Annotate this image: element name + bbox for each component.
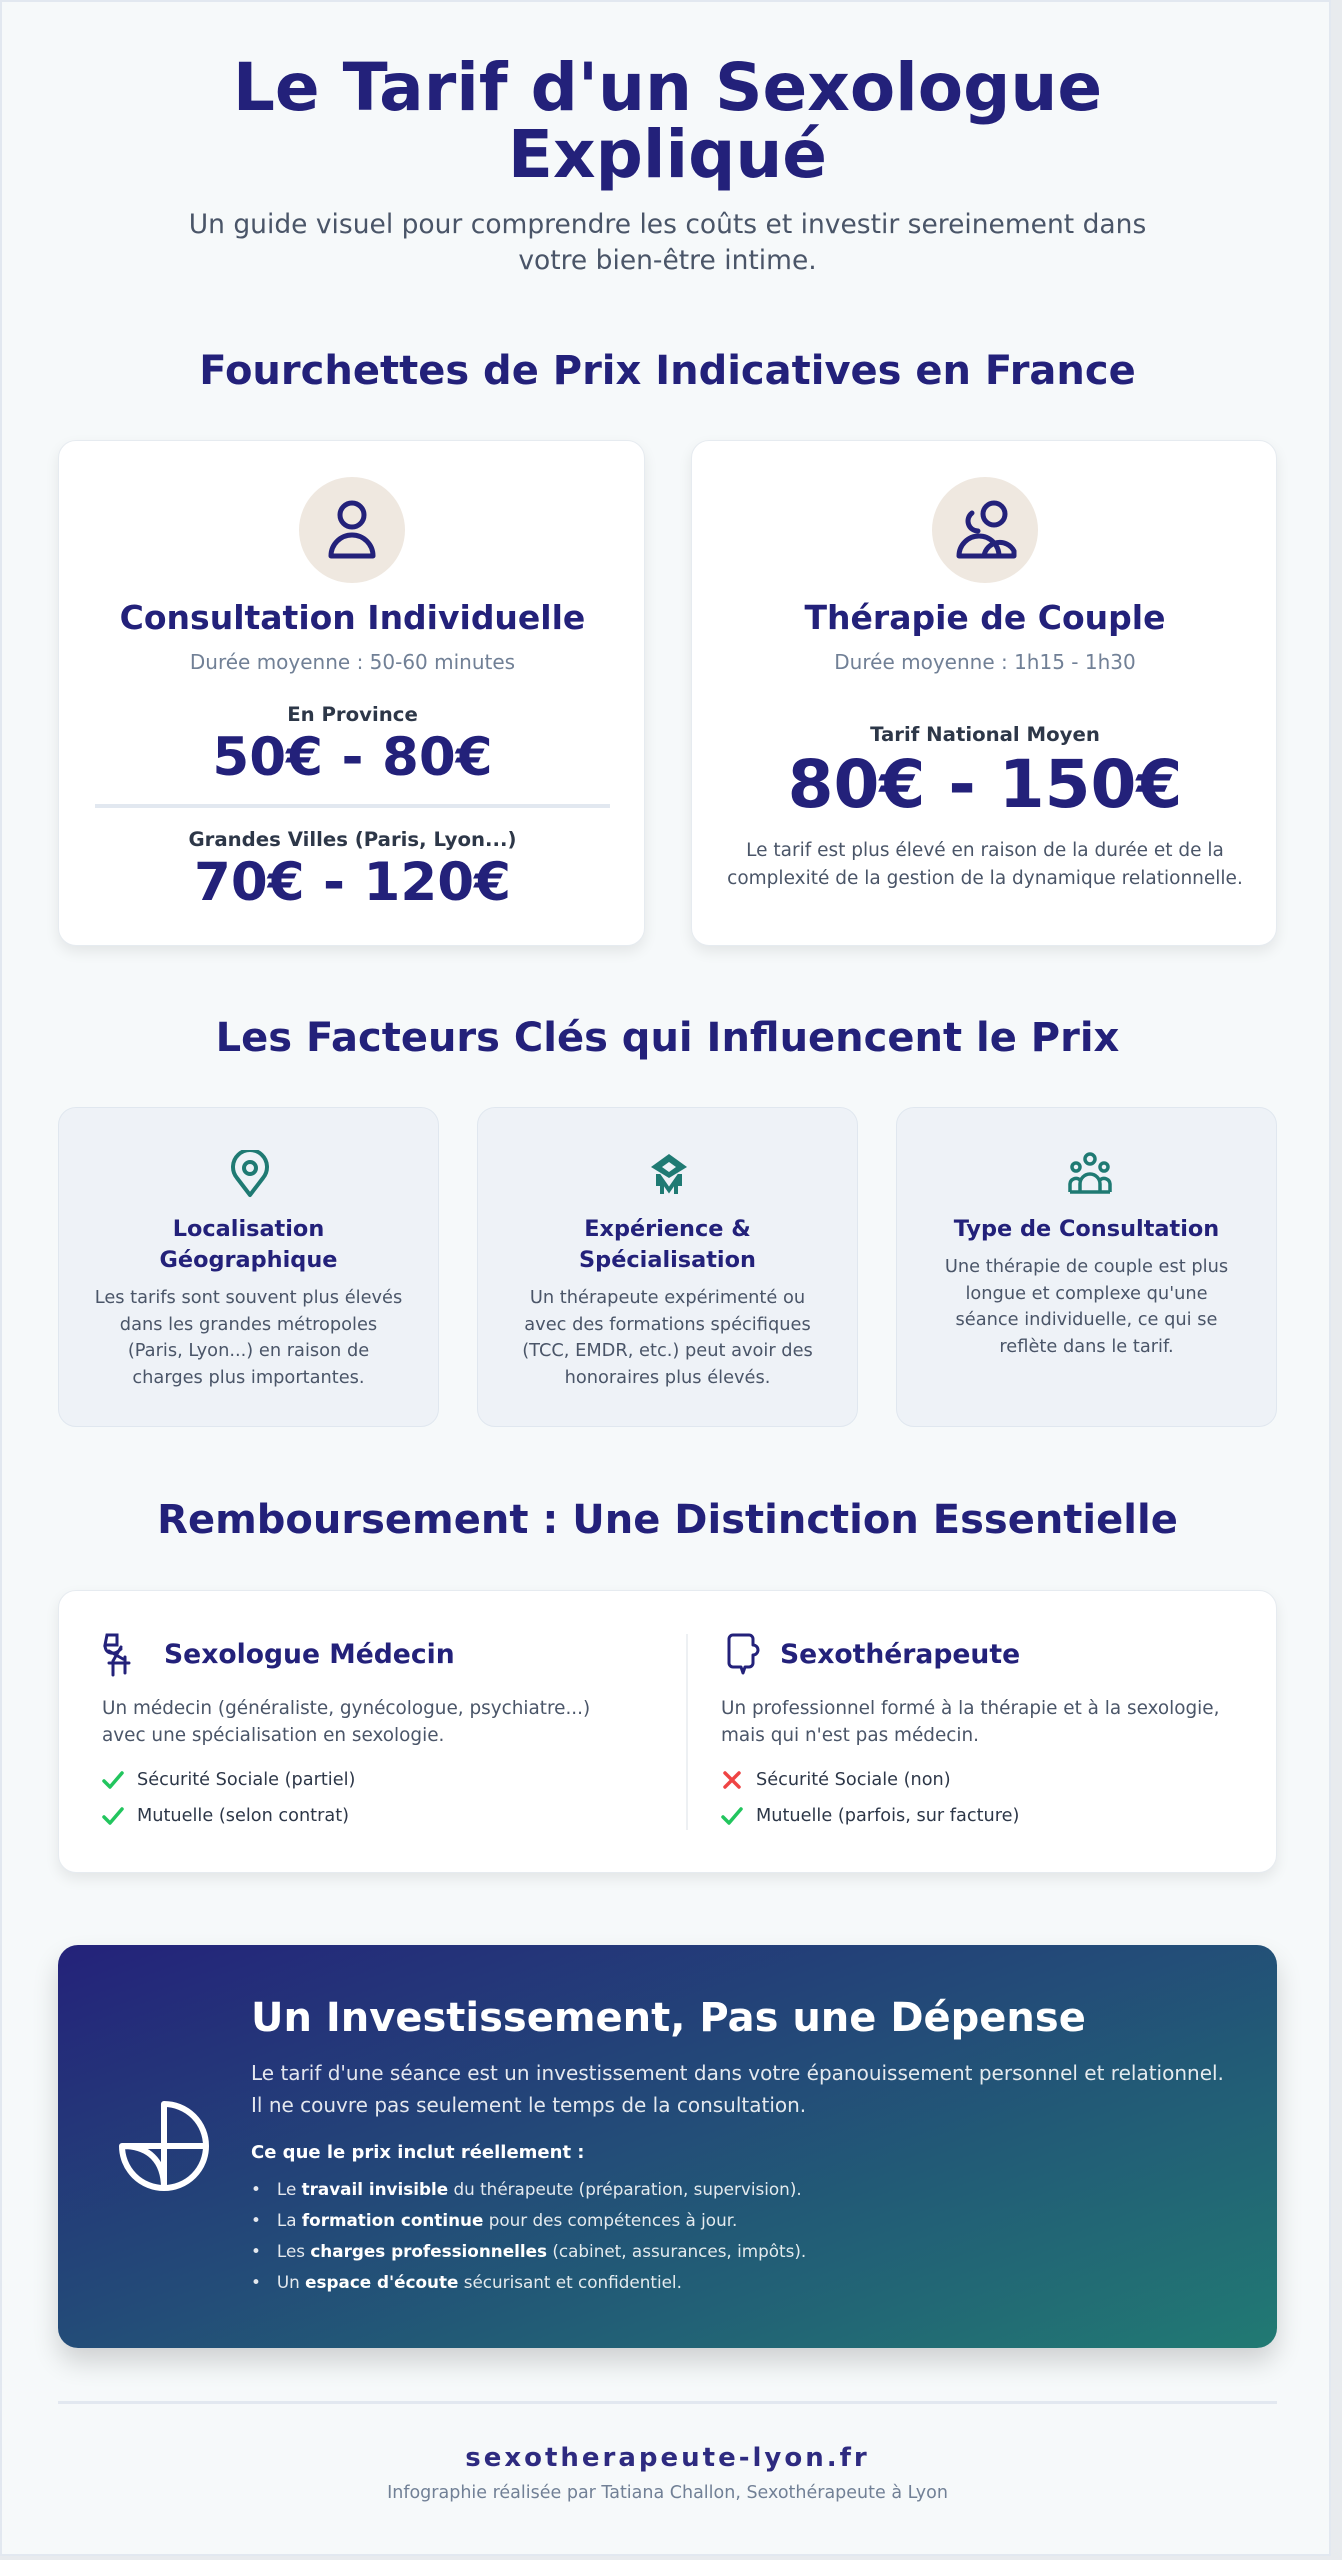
title: Le Tarif d'un Sexologue [233, 49, 1102, 126]
icon: person [299, 477, 405, 583]
footer: website: sexotherapeute-lyon.fr [465, 2443, 870, 2473]
icon: graduation [651, 1154, 687, 1194]
panel: experience factor: Spécialisation [579, 1247, 756, 1273]
callout title: Un Investissement, Pas une Dépense [251, 1995, 1086, 2041]
footer: credit: Infographie réalisée par Tatiana Challon, Sexothérapeute à Lyon [387, 2483, 948, 2503]
subtitle: votre bien-être intime. [518, 245, 817, 276]
check item: Mutuelle (selon contrat) [137, 1806, 349, 1826]
explanation: Le tarif est plus élevé en raison de la durée et de la complexité de la gestion de la dynamique relationnelle. [727, 840, 1243, 889]
price: big cities: 70€ - 120€ [194, 852, 511, 913]
icon: group [1068, 1152, 1112, 1194]
panel: experience factor: (TCC, EMDR, etc.) peut avoir des [522, 1340, 813, 1361]
column: sexologue medecin [102, 1634, 590, 1826]
panel: consultation type factor: séance individuelle, ce qui se [956, 1309, 1217, 1330]
heading: reimbursement: Remboursement : Une Distinction Essentielle [157, 1497, 1178, 1543]
duration: Durée moyenne : 1h15 - 1h30 [834, 650, 1136, 674]
subtitle: Un guide visuel pour comprendre les coûts et investir sereinement dans [189, 209, 1146, 240]
title: Expliqué [508, 116, 827, 193]
price: province: 50€ - 80€ [212, 727, 493, 788]
list heading: Ce que le prix inclut réellement : [251, 2142, 585, 2163]
price: big cities [189, 828, 516, 913]
panel: consultation type factor: Type de Consultation [954, 1216, 1219, 1242]
bullet list: • Le travail invisible du thérapeute (préparation, supervision). [251, 2179, 802, 2199]
panel: consultation type factor: longue et complexe qu'une [965, 1283, 1208, 1304]
duration: Durée moyenne : 50-60 minutes [190, 650, 515, 674]
panel: location factor: dans les grandes métropoles [120, 1314, 377, 1335]
check item: Sécurité Sociale (partiel) [137, 1770, 355, 1790]
check item: Mutuelle (parfois, sur facture) [756, 1806, 1019, 1826]
panel: location factor: Localisation [173, 1216, 324, 1242]
column: sexotherapeute: Sexothérapeute [780, 1639, 1020, 1670]
bullet list: • La formation continue pour des compétences à jour. [251, 2210, 737, 2230]
bullet list: • Les charges professionnelles (cabinet, assurances, impôts). [251, 2241, 806, 2261]
bullet list [251, 2179, 806, 2292]
column: sexologue medecin: Un médecin (généraliste, gynécologue, psychiatre...) avec une spécialisation en sexologie. [102, 1698, 590, 1746]
column: sexologue medecin: Sexologue Médecin [164, 1639, 455, 1670]
bullet list: • Un espace d'écoute sécurisant et confidentiel. [251, 2272, 682, 2292]
panel: experience factor: avec des formations spécifiques [524, 1314, 811, 1335]
icon: doctor [103, 1634, 130, 1676]
price: province: En Province [287, 703, 418, 726]
panel: experience factor: honoraires plus élevés. [565, 1367, 770, 1388]
card title: Consultation Individuelle [120, 598, 585, 637]
icon: pie chart [119, 2101, 209, 2191]
icon: speech bubble [728, 1634, 760, 1674]
heading: price ranges: Fourchettes de Prix Indicatives en France [199, 348, 1136, 394]
panel: location factor: charges plus importantes. [132, 1367, 365, 1388]
panel: location factor: Les tarifs sont souvent plus élevés [95, 1287, 402, 1308]
panel: location factor: (Paris, Lyon...) en raison de [128, 1340, 369, 1361]
icon: couple [932, 477, 1038, 583]
icon: map pin [231, 1150, 269, 1198]
panel: experience factor [477, 1107, 858, 1427]
price: national: Tarif National Moyen [870, 723, 1100, 746]
card title: Thérapie de Couple [805, 598, 1165, 637]
panel: experience factor: Un thérapeute expérimenté ou [530, 1287, 805, 1308]
panel: investment callout [58, 1945, 1277, 2348]
callout text [251, 2061, 1224, 2117]
panel: consultation type factor [896, 1107, 1277, 1427]
column: sexotherapeute [721, 1634, 1219, 1826]
panel: location factor [58, 1107, 439, 1427]
panel: reimbursement comparison [58, 1590, 1277, 1873]
cross item: Sécurité Sociale (non) [756, 1770, 951, 1790]
callout text: Le tarif d'une séance est un investissement dans votre épanouissement personnel et relationnel. [251, 2061, 1224, 2085]
title [233, 49, 1102, 193]
panel: individual consultation [58, 440, 645, 946]
callout text: Il ne couvre pas seulement le temps de la consultation. [251, 2093, 806, 2117]
price: national: 80€ - 150€ [788, 746, 1182, 823]
column: sexotherapeute: Un professionnel formé à la thérapie et à la sexologie, mais qui n'est pas médecin. [721, 1698, 1219, 1746]
price: big cities: Grandes Villes (Paris, Lyon...) [189, 828, 516, 851]
panel: consultation type factor: Une thérapie de couple est plus [945, 1256, 1228, 1277]
panel: couple therapy [691, 440, 1277, 946]
subtitle [189, 209, 1146, 276]
panel: location factor: Géographique [160, 1247, 337, 1273]
heading: factors: Les Facteurs Clés qui Influencent le Prix [216, 1015, 1119, 1061]
panel: experience factor: Expérience & [584, 1216, 751, 1242]
panel: consultation type factor: reflète dans le tarif. [999, 1336, 1174, 1357]
